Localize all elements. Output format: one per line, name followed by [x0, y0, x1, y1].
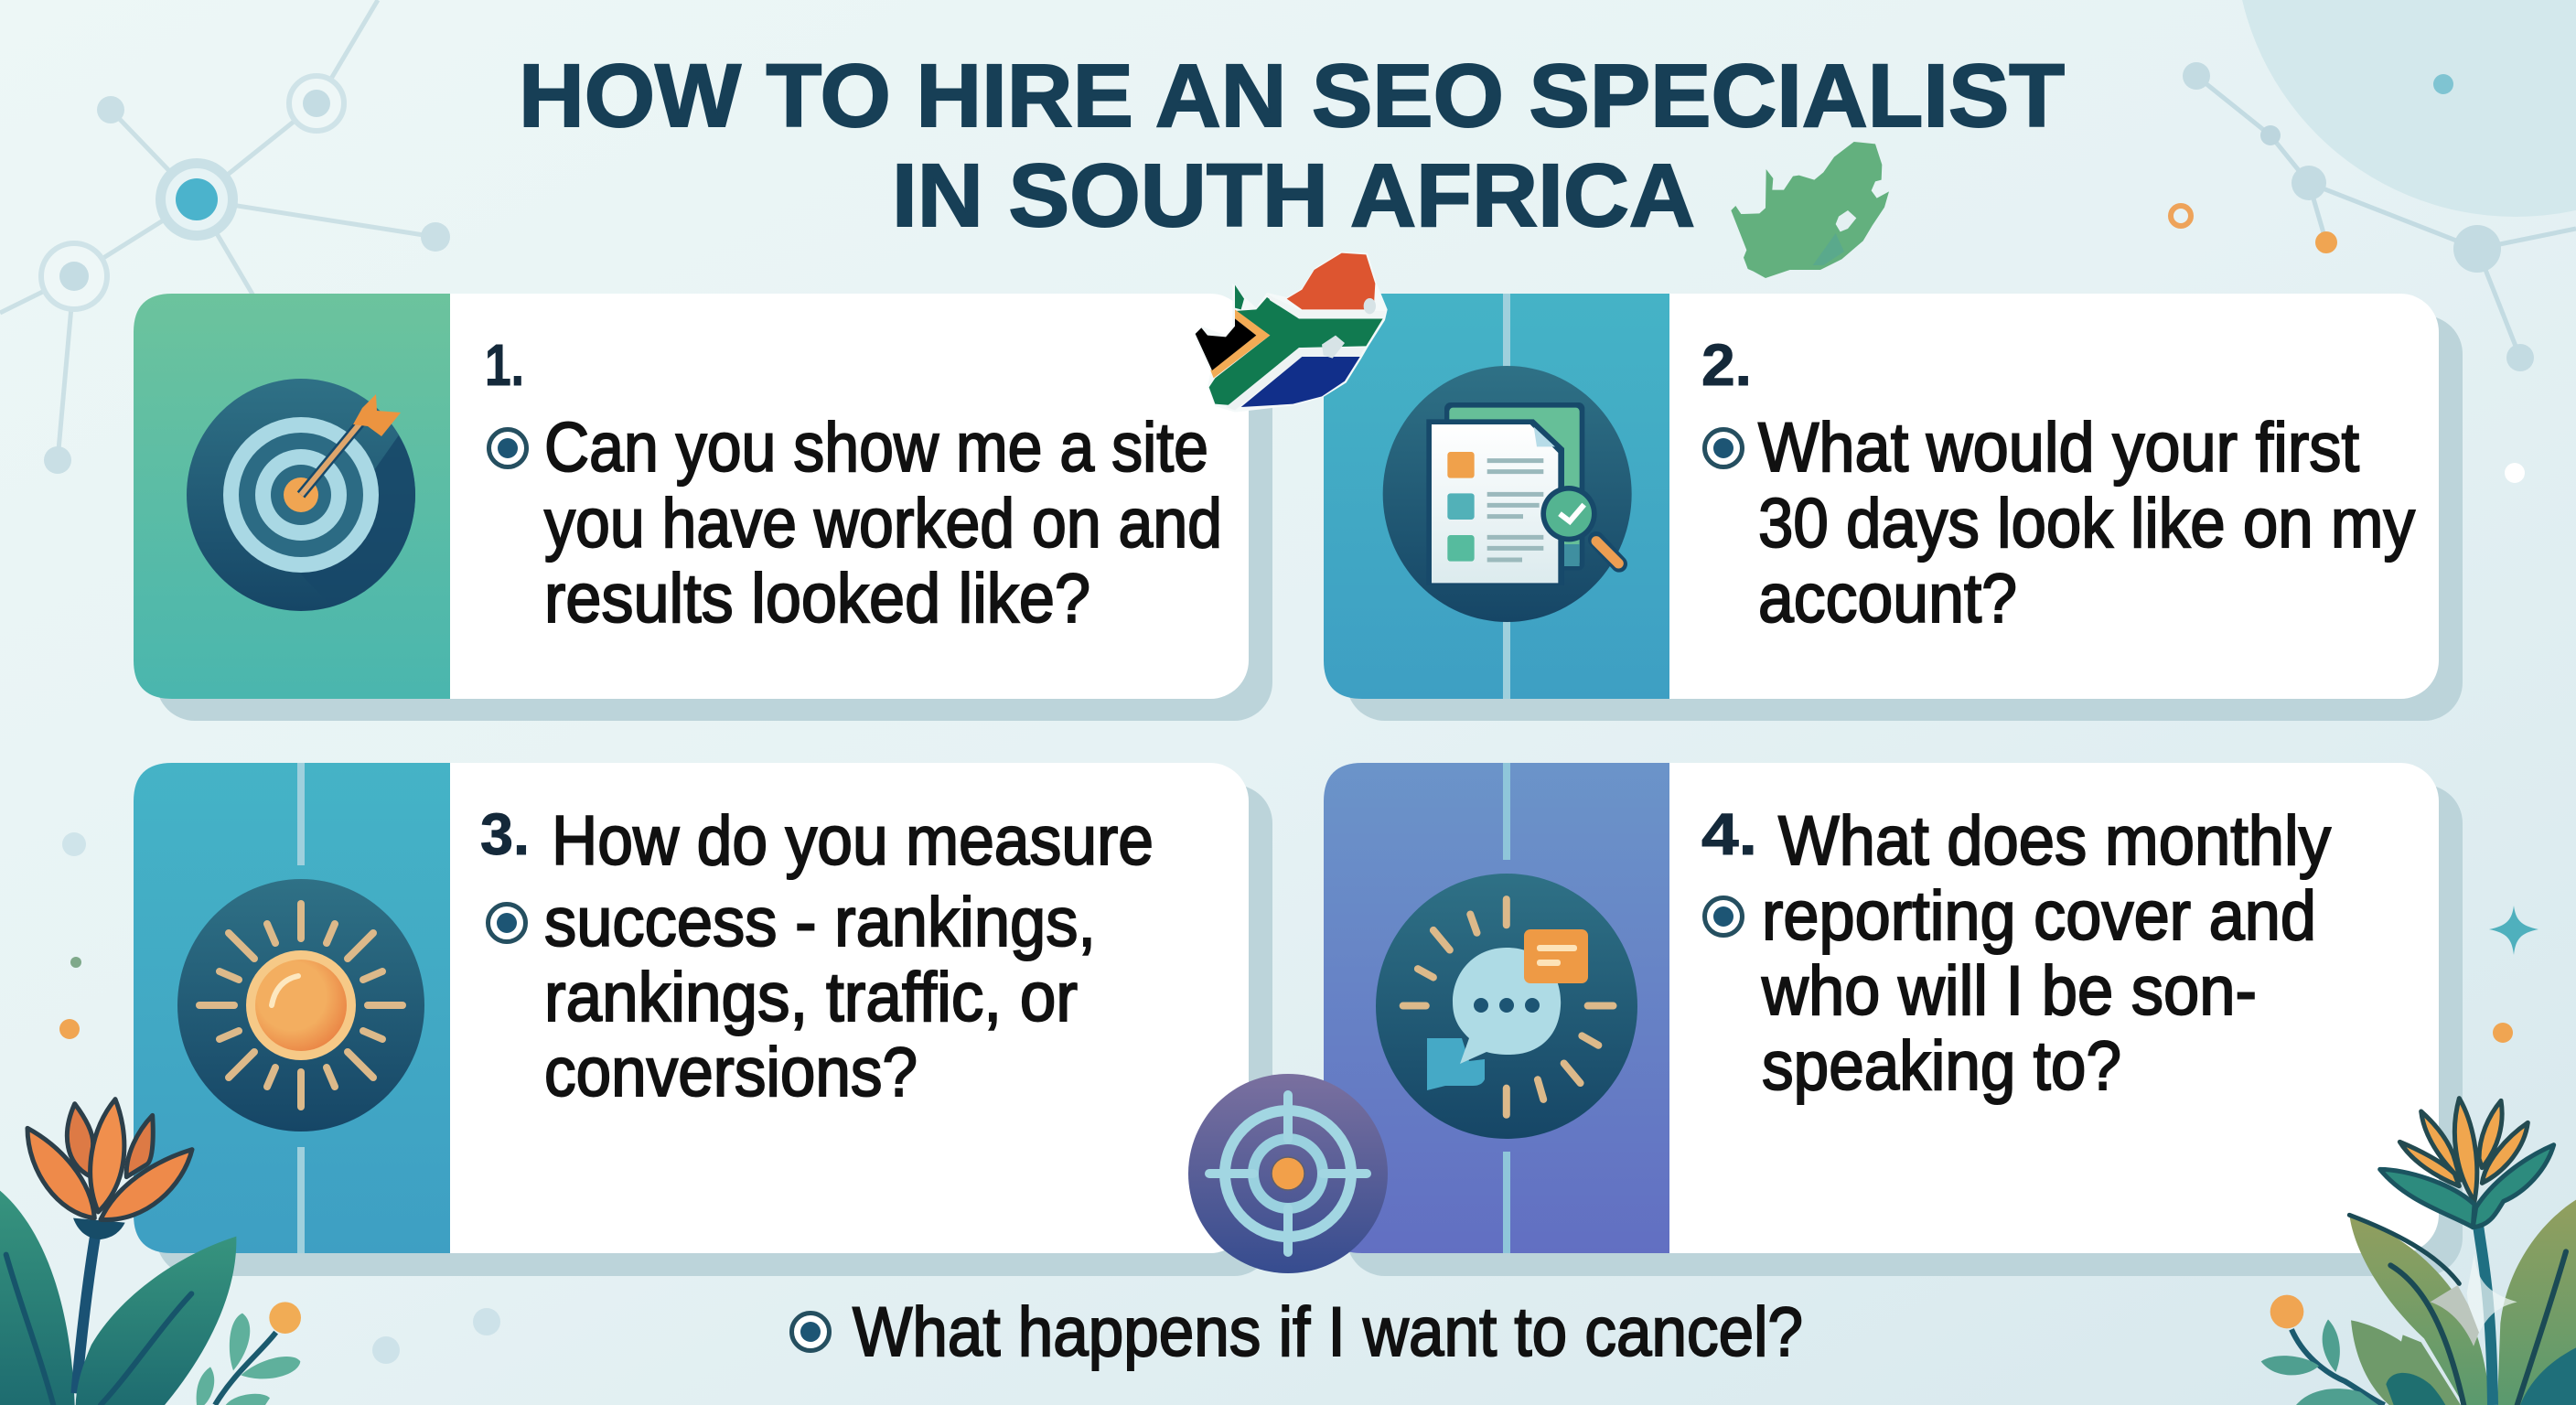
panel: card 4 — [1324, 763, 2463, 1276]
question text 2: account? — [1758, 560, 2017, 638]
question text 1: you have worked on and — [544, 485, 1222, 563]
icon: sun — [177, 879, 424, 1132]
panel: card 1 — [134, 294, 1272, 721]
question text 1 — [544, 409, 1222, 638]
icon: chat bubbles — [1376, 874, 1637, 1139]
background circle top right — [2235, 0, 2576, 217]
bullet icon — [792, 1314, 829, 1350]
question text 1: Can you show me a site — [544, 409, 1208, 487]
number 4: 4. — [1701, 801, 1757, 867]
bullet icon — [1705, 430, 1742, 467]
title: IN SOUTH AFRICA — [892, 145, 1695, 245]
card 4 shadow — [1347, 785, 2463, 1276]
network decoration right — [2171, 62, 2576, 483]
card 1 shadow — [156, 316, 1272, 721]
bullet icon — [488, 430, 527, 467]
closing question — [792, 1293, 1803, 1371]
panel: card 2 — [1324, 294, 2463, 721]
panel: card 3 — [134, 763, 1272, 1276]
card 2 body — [1324, 294, 2439, 699]
card 3 colour panel — [134, 763, 450, 1253]
number 1: 1. — [485, 332, 524, 398]
question text 1: results looked like? — [544, 560, 1090, 638]
question text 3: rankings, traffic, or — [544, 959, 1078, 1036]
network decoration left — [0, 0, 450, 474]
question text 4: What does monthly — [1778, 802, 2331, 880]
number 3: 3. — [480, 801, 530, 867]
question text 4 — [1761, 802, 2331, 1105]
number 2: 2. — [1701, 332, 1752, 398]
card 3 body — [134, 763, 1249, 1253]
card 4 body — [1324, 763, 2439, 1253]
scattered dots and sparkle — [59, 832, 2538, 1364]
card 3 shadow — [156, 785, 1272, 1276]
question text 3: success - rankings, — [544, 884, 1096, 961]
question text 2: 30 days look like on my — [1758, 485, 2415, 563]
icon: checklist document with magnifier — [1383, 366, 1632, 622]
icon: target with arrow — [187, 379, 415, 611]
question text 3: How do you measure — [552, 802, 1154, 880]
card 2 colour panel — [1324, 294, 1669, 699]
question text 4: reporting cover and — [1762, 877, 2316, 955]
icon: crosshair target badge — [1188, 1074, 1388, 1273]
question text 4: who will I be son- — [1761, 952, 2257, 1030]
question text 4: speaking to? — [1762, 1027, 2121, 1105]
illustration: left flower and leaves — [0, 1099, 301, 1405]
bullet icon — [1705, 898, 1742, 935]
title: HOW TO HIRE AN SEO SPECIALIST — [519, 46, 2065, 145]
card 4 colour panel — [1324, 763, 1669, 1253]
card 1 body — [134, 294, 1249, 699]
closing question text: What happens if I want to cancel? — [853, 1293, 1803, 1371]
illustration: right flower and leaves — [2261, 1099, 2576, 1405]
card 1 colour panel — [134, 294, 450, 699]
bullet icon — [488, 904, 525, 942]
question text 3 — [544, 802, 1154, 1111]
question text 2 — [1758, 409, 2415, 638]
question text 2: What would your first — [1758, 409, 2359, 487]
title — [519, 46, 2065, 245]
question text 3: conversions? — [544, 1034, 918, 1111]
card 2 shadow — [1347, 316, 2463, 721]
icon: green South Africa map — [1731, 142, 1889, 278]
icon: South African flag map — [1194, 252, 1388, 413]
